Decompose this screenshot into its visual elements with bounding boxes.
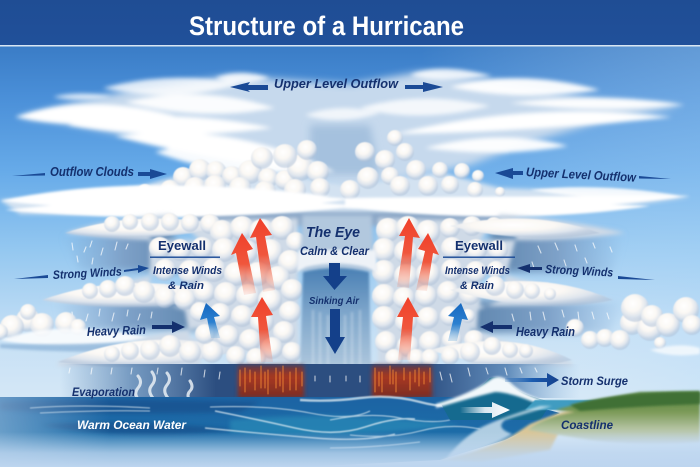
dark rain band: [60, 364, 580, 398]
label: strong winds left: [14, 264, 149, 282]
upper anvil cloud: [15, 69, 685, 190]
label: eyewall right: [443, 238, 515, 292]
evaporation wisps: [136, 372, 192, 412]
label: heavy rain right: [480, 321, 575, 339]
right mass: [376, 218, 400, 242]
label: eyewall left: Intense Winds: [153, 265, 222, 277]
label: strong winds left: Strong Winds: [52, 264, 122, 282]
lower cloud shadows and rain zones: [55, 226, 626, 333]
label: eyewall right: Eyewall: [455, 238, 503, 253]
label: eyewall right: & Rain: [460, 280, 494, 292]
label: outflow clouds: [12, 165, 167, 179]
label: evaporation: Evaporation: [72, 385, 135, 399]
updraft arrows: blue: [200, 303, 468, 341]
label: storm surge: [505, 373, 628, 388]
land and beach: [440, 391, 700, 462]
label: warm ocean water: Warm Ocean Water: [77, 418, 187, 432]
bottom fade: [0, 432, 700, 467]
label: eyewall right: Intense Winds: [445, 265, 510, 277]
updraft arrows: red: [231, 218, 439, 362]
label: storm surge: Storm Surge: [561, 374, 628, 388]
label: the eye: Calm & Clear: [300, 246, 369, 258]
label: heavy rain right: Heavy Rain: [516, 325, 575, 339]
ocean: [0, 397, 560, 467]
label: eyewall left: [150, 238, 222, 292]
second cloud layer: [0, 130, 690, 226]
title: Structure of a Hurricane: [189, 11, 464, 41]
label: eyewall left: & Rain: [168, 280, 204, 292]
label: strong winds right: [517, 262, 655, 280]
label: upper level outflow right: [495, 165, 671, 185]
label: the eye: The Eye: [306, 224, 360, 241]
label: upper level outflow right: Upper Level Outflow: [526, 165, 637, 185]
label: heavy rain left: Heavy Rain: [87, 323, 146, 339]
right bands: [450, 218, 600, 238]
label: strong winds right: Strong Winds: [545, 262, 614, 280]
title banner: [0, 0, 700, 46]
label: the eye: Sinking Air: [309, 295, 360, 307]
label: eyewall left: Eyewall: [158, 238, 206, 253]
label: outflow clouds: Outflow Clouds: [50, 165, 134, 179]
label: the eye: [300, 224, 369, 354]
label: heavy rain left: [87, 321, 185, 339]
the eye column: [297, 215, 377, 368]
surge arrow: white: [460, 402, 510, 418]
side cumulus clouds: [0, 294, 700, 355]
label: upper level outflow top: Upper Level Outflow: [274, 77, 399, 91]
left bands: [65, 218, 230, 238]
label: upper level outflow top: [230, 77, 443, 92]
left mass: [210, 220, 234, 244]
storm surge wave: [436, 377, 610, 420]
label: coastline: Coastline: [561, 418, 613, 432]
eye wall clouds: [42, 213, 625, 368]
